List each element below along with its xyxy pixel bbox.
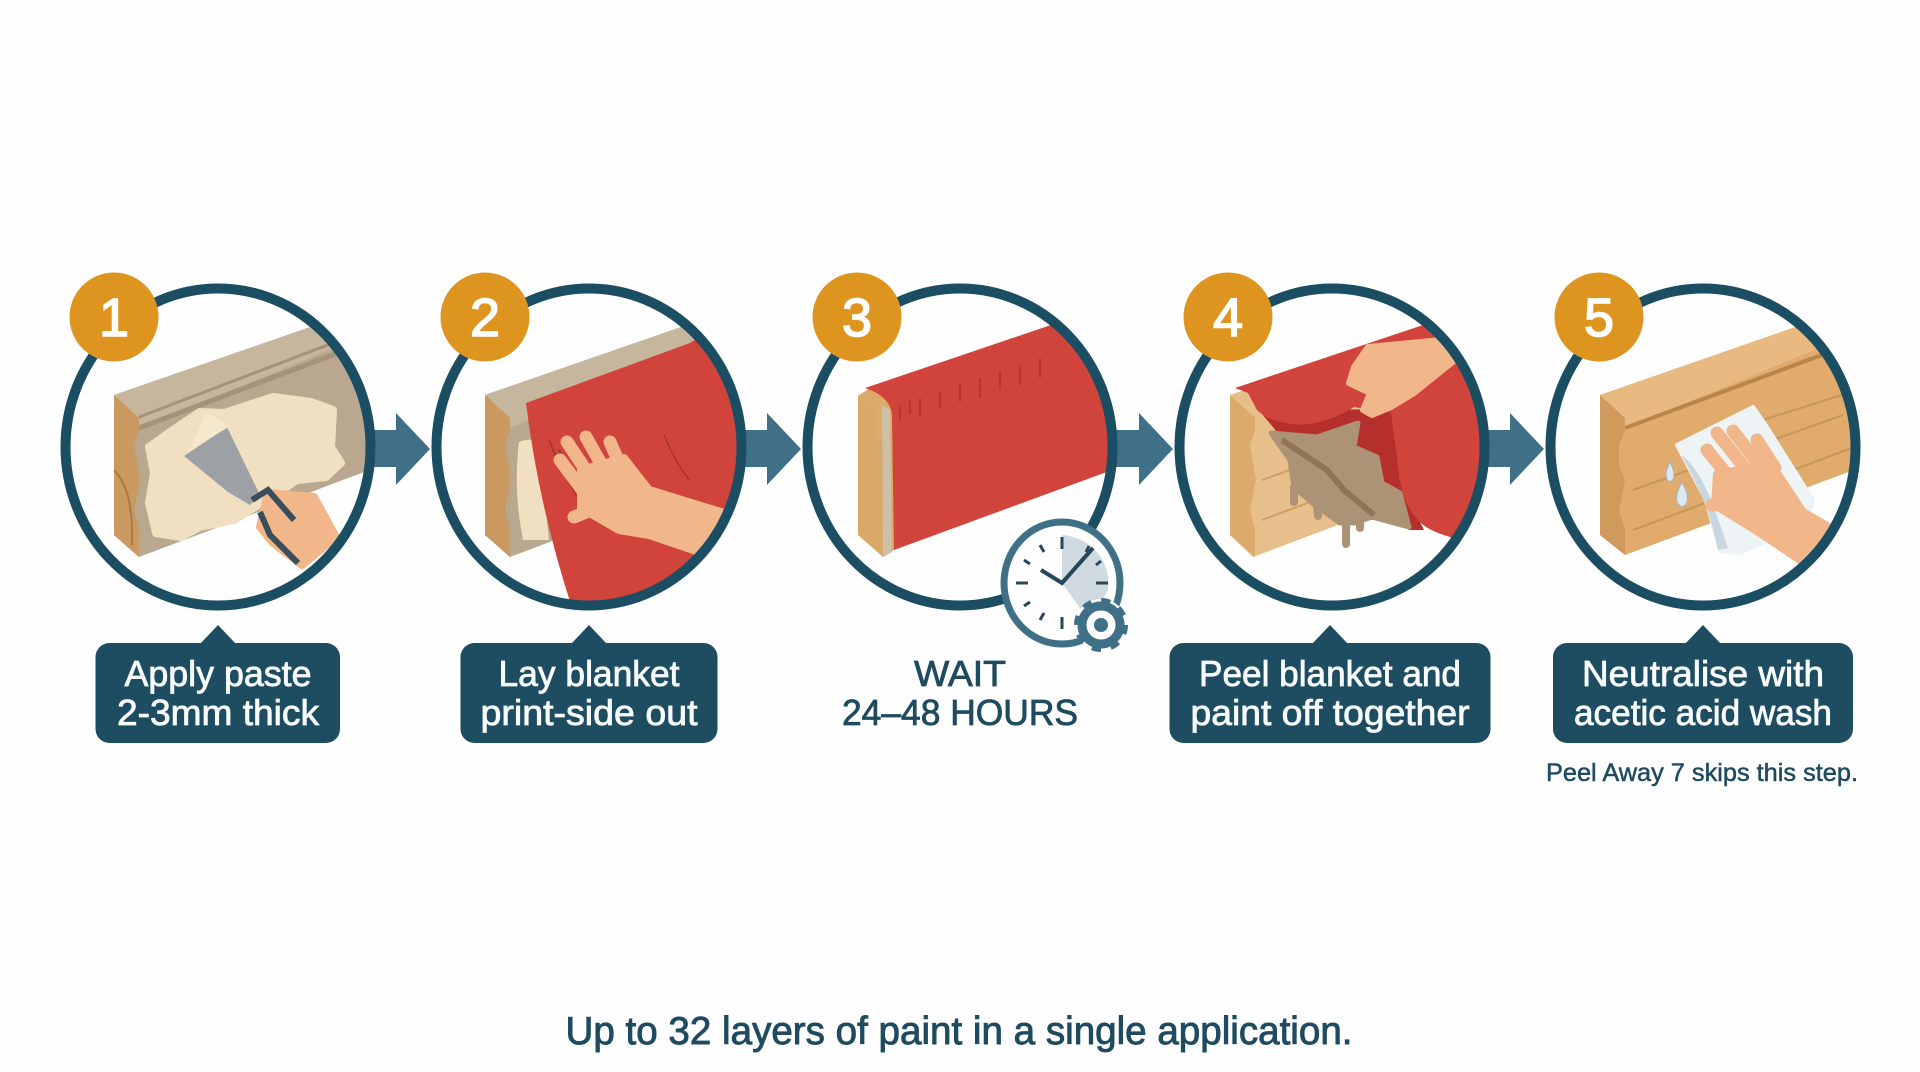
panel: step 5 neutralise [1550, 288, 1873, 606]
label: neutralise [1553, 625, 1853, 743]
label: wait 24-48 hours: 24–48 HOURS [842, 692, 1078, 733]
illustration: wiping bare wood with cloth [1600, 327, 1850, 564]
illustration: blanket laid over moulding with hand [485, 327, 736, 600]
infographic [60, 272, 1860, 1052]
illustration: peeling blanket and paint [1230, 325, 1480, 557]
arrow: step 1 to 2 [372, 413, 430, 485]
badge: number 1 [70, 272, 158, 362]
label: lay blanket: Lay blanket [498, 653, 680, 694]
badge: number 5: 5 [1584, 288, 1614, 348]
badge: number 4 [1184, 272, 1272, 362]
panel: step 1 apply paste [66, 288, 388, 606]
ring [66, 288, 370, 606]
panel: step 3 wait [808, 288, 1130, 606]
badge: number 4: 4 [1213, 288, 1243, 348]
label: neutralise: Neutralise with [1582, 653, 1824, 694]
badge: number 3: 3 [842, 288, 872, 348]
badge: number 1: 1 [99, 288, 129, 348]
arrow: step 2 to 3 [743, 413, 801, 485]
badge: number 5 [1554, 272, 1644, 362]
panel: step 4 peel [1180, 288, 1502, 606]
note: peel away 7: Peel Away 7 skips this step. [1546, 759, 1858, 787]
label: peel blanket: Peel blanket and [1199, 653, 1461, 694]
arrow: step 3 to 4 [1114, 413, 1173, 485]
footer statement: Up to 32 layers of paint in a single application. [566, 1010, 1352, 1053]
icon: clock with gear [1004, 522, 1127, 651]
label: lay blanket [460, 625, 718, 743]
ring [808, 288, 1112, 606]
arrow: step 4 to 5 [1486, 413, 1544, 485]
label: peel blanket: paint off together [1190, 692, 1470, 733]
panel: step 2 lay blanket [436, 288, 759, 620]
label: wait 24-48 hours [842, 653, 1078, 733]
ring [1550, 288, 1856, 606]
ring [436, 288, 742, 606]
illustration: moulding covered by blanket [858, 325, 1108, 557]
label: wait 24-48 hours: WAIT [914, 653, 1006, 694]
label: apply paste [96, 625, 340, 743]
label: lay blanket: print-side out [480, 692, 698, 733]
badge: number 3 [812, 272, 902, 362]
illustration: moulding with paste and scraper [113, 327, 366, 570]
ring [1180, 288, 1484, 606]
badge: number 2: 2 [470, 288, 500, 348]
label: apply paste: 2-3mm thick [117, 692, 320, 733]
label: peel blanket [1170, 625, 1490, 743]
label: neutralise: acetic acid wash [1574, 692, 1832, 733]
badge: number 2 [440, 272, 530, 362]
label: apply paste: Apply paste [124, 653, 312, 694]
